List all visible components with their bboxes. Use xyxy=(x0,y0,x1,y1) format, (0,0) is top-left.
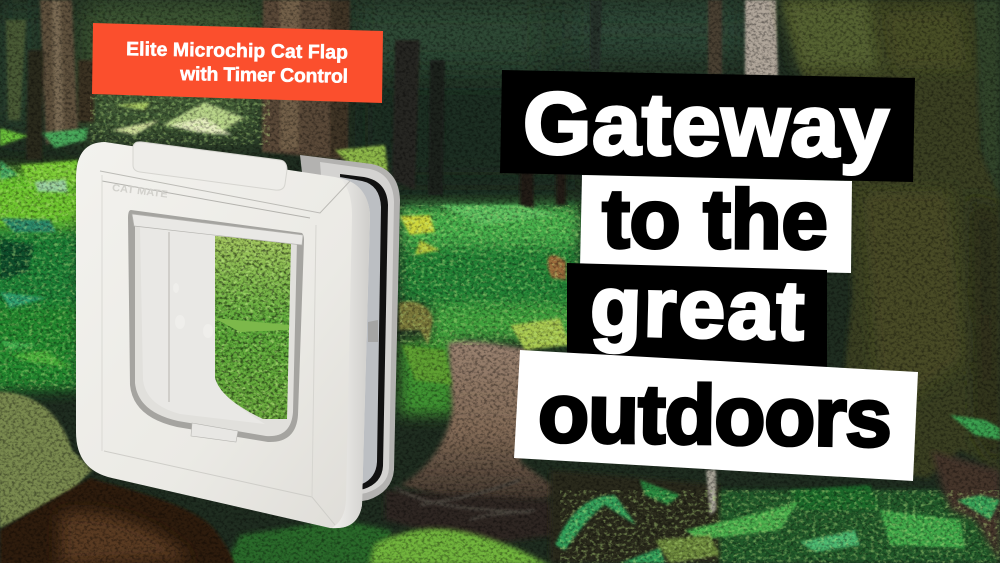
flap: paw prints xyxy=(173,283,213,338)
flap: side bevel xyxy=(332,178,370,528)
background: roots and dark soil xyxy=(385,480,560,545)
flap: clear panel xyxy=(140,226,265,424)
background: bright undergrowth xyxy=(0,170,580,415)
background: mossy log xyxy=(0,392,235,563)
background: dirt path xyxy=(400,341,560,505)
flap: handle xyxy=(133,142,287,190)
flap: inner panel xyxy=(340,177,381,486)
product label banner xyxy=(92,23,383,103)
headline line: to the: to the xyxy=(602,171,828,267)
headline line: outdoors: outdoors xyxy=(537,366,893,464)
flap: bottom bevel lines xyxy=(104,451,335,525)
background: canopy glow xyxy=(0,0,750,190)
headline line: Gateway: Gateway xyxy=(523,73,889,176)
banner text line 2: with Timer Control xyxy=(179,63,348,88)
flap: front face xyxy=(76,142,370,528)
flap: latch xyxy=(368,320,378,342)
flap: bottom clip xyxy=(191,423,238,442)
cat flap product xyxy=(76,142,400,528)
background: undergrowth bottom xyxy=(225,470,1000,563)
banner text line 1: Elite Microchip Cat Flap xyxy=(126,38,348,64)
background: left tree trunks xyxy=(6,0,778,210)
flap: black gasket xyxy=(340,174,388,492)
flap: top plate line xyxy=(100,171,350,213)
flap: rear frame xyxy=(300,155,400,505)
background: big mossy trunk xyxy=(780,0,1000,563)
background: large leaves xyxy=(0,102,1000,520)
headline line: great: great xyxy=(589,258,805,358)
headline xyxy=(500,70,918,481)
flap: window frame xyxy=(128,210,304,442)
flap: top hinge bar xyxy=(132,214,303,245)
flap: brand mark: CAT MATE xyxy=(111,183,169,201)
headline line: outdoors xyxy=(514,350,918,481)
background: ferns xyxy=(555,470,965,563)
flap: forest through window xyxy=(215,236,291,419)
